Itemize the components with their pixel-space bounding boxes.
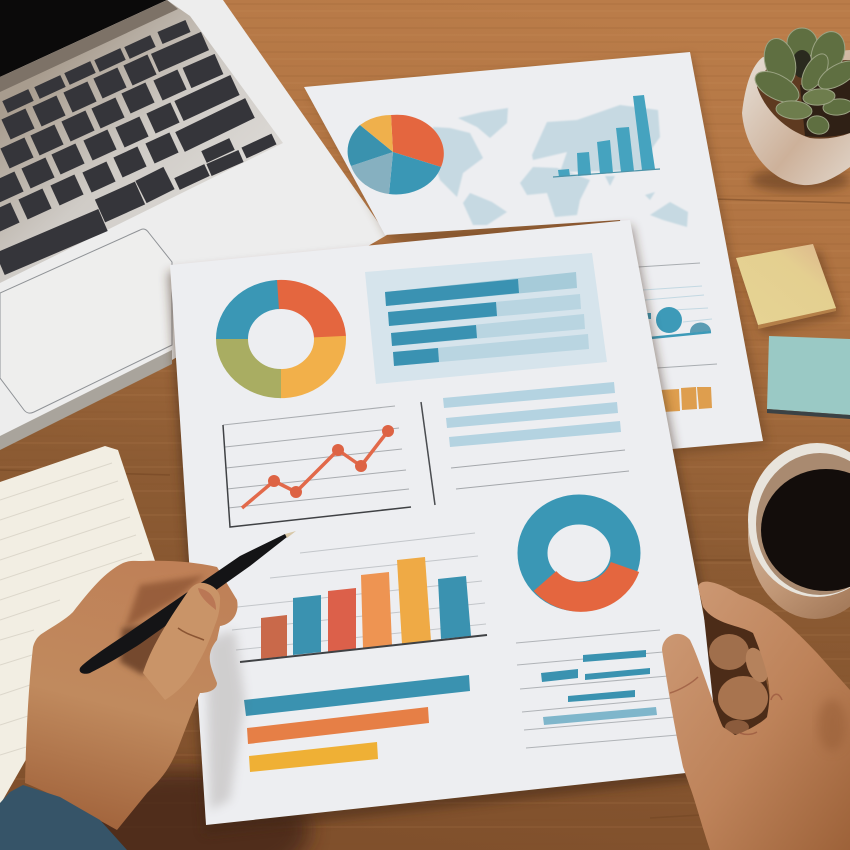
- laptop screen: [0, 0, 167, 77]
- world map: [433, 105, 688, 227]
- cup rim: [748, 443, 850, 597]
- soil: [757, 60, 850, 139]
- coffee cup: [748, 443, 850, 619]
- mini charts on back sheet: [638, 263, 717, 412]
- white pot: [742, 50, 850, 185]
- denim sleeve: [0, 785, 127, 850]
- back report sheet: [304, 52, 768, 455]
- hand: [662, 582, 850, 850]
- notebook: [0, 446, 155, 805]
- donut chart: four segments: [228, 291, 334, 387]
- trackpad: [0, 229, 172, 413]
- mini bar legend: [516, 630, 678, 748]
- dark gap under pen: [120, 622, 170, 675]
- thumb over pen: [143, 583, 220, 700]
- laptop: [0, 0, 387, 450]
- front report sheet: [168, 220, 738, 834]
- shade under index finger: [125, 575, 205, 628]
- shadow of hand on sheet: [206, 630, 245, 810]
- text placeholder lines: [443, 382, 629, 489]
- dark shadow at bottom left: [50, 770, 310, 850]
- right hand holding sheet: [662, 582, 850, 850]
- column chart: [228, 533, 487, 662]
- curled fingers: [709, 634, 773, 734]
- succulent leaves: [750, 27, 850, 137]
- pen: [80, 531, 296, 674]
- horizontal bars: [244, 675, 470, 772]
- large donut chart: [532, 510, 626, 597]
- line chart: [223, 406, 411, 527]
- palm and fingers: [25, 561, 238, 830]
- keyboard: [0, 0, 283, 283]
- coffee: [761, 469, 850, 591]
- teal note: [767, 336, 850, 419]
- pie chart: [348, 115, 444, 194]
- progress bars panel: [365, 253, 607, 384]
- cup body: [748, 451, 850, 619]
- yellow note: [736, 244, 836, 329]
- left hand holding pen: [0, 531, 296, 850]
- potted succulent: [742, 27, 850, 192]
- sticky notes: [736, 244, 850, 419]
- shadow between fingers: [703, 607, 775, 740]
- bar chart: [553, 95, 660, 177]
